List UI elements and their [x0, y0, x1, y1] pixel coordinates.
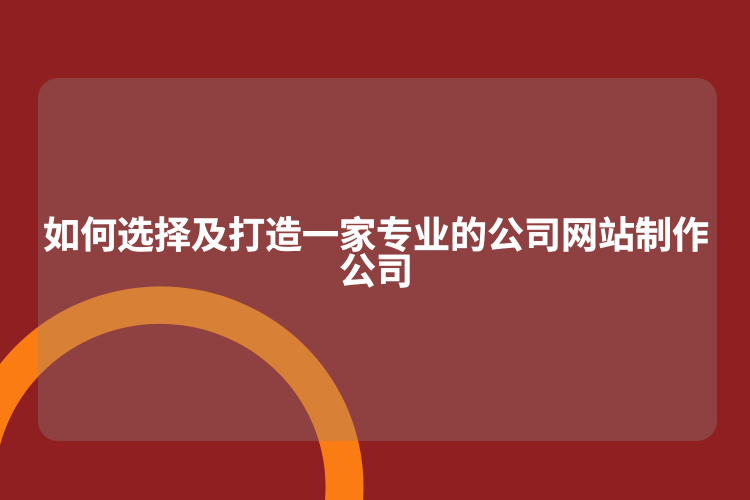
translucent panel — [38, 78, 717, 441]
title: 如何选择及打造一家专业的公司网站制作 — [43, 215, 709, 256]
title — [43, 215, 709, 292]
title: 公司 — [339, 251, 413, 292]
